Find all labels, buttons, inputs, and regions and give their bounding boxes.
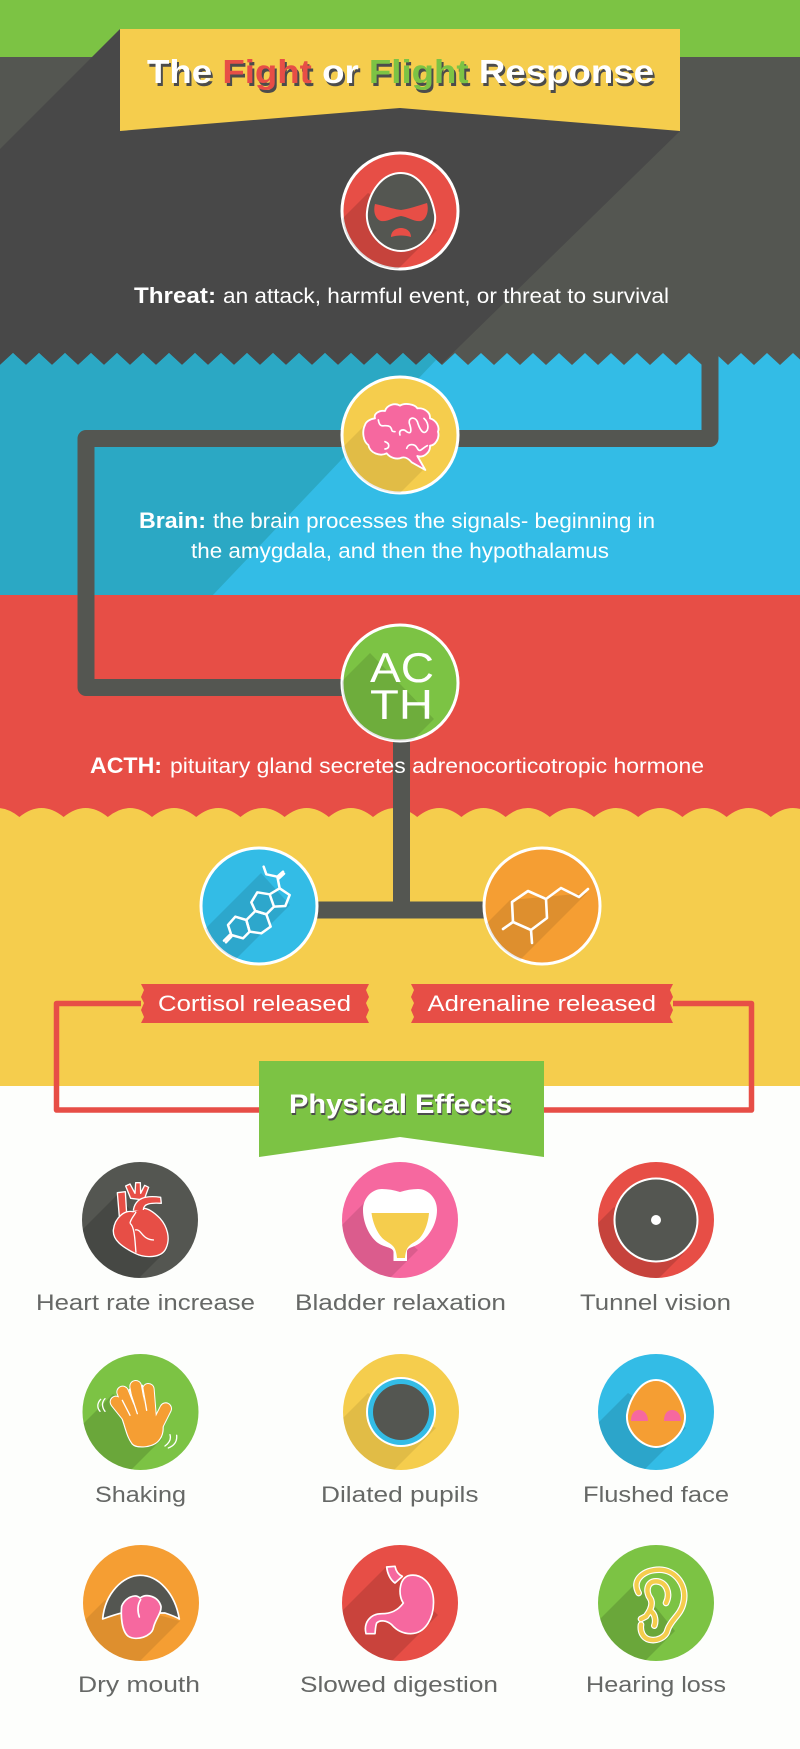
tag: adrenaline released (411, 984, 673, 1023)
icon: brain (340, 376, 460, 494)
physical effects banner (259, 1061, 544, 1157)
heading: physical effects: Physical Effects (289, 1089, 512, 1119)
tag: adrenaline released: Adrenaline released (428, 991, 656, 1016)
text: ACTH description: pituitary gland secretes adrenocorticotropic hormone (170, 754, 704, 778)
icon: heart (82, 1162, 198, 1278)
icon: cortisol molecule (200, 846, 318, 966)
text: brain description (139, 508, 655, 563)
icon: adrenaline molecule (482, 846, 602, 966)
icon: stomach (342, 1545, 458, 1661)
icon: threat face (340, 152, 460, 270)
icon: ACTH (340, 624, 460, 742)
tag: cortisol released (141, 984, 369, 1023)
icon: dry mouth (83, 1545, 199, 1661)
label: heart rate: Heart rate increase (36, 1290, 255, 1315)
label: dry mouth: Dry mouth (78, 1672, 200, 1697)
icon: ACTH: TH (370, 681, 433, 728)
label: bladder: Bladder relaxation (295, 1290, 506, 1315)
red connector: hormones to physical effects (56, 1004, 752, 1110)
icon: ear (598, 1545, 714, 1661)
title: The Fight or Flight Response (147, 53, 654, 90)
icon: dilated pupil (343, 1354, 459, 1470)
title banner (120, 29, 680, 131)
panel: ACTH red background (0, 595, 800, 820)
tag: cortisol released: Cortisol released (158, 991, 351, 1016)
icon: ACTH: AC (370, 644, 434, 691)
text: ACTH description: ACTH: (90, 753, 162, 778)
icon: bladder (342, 1162, 458, 1278)
icon: flushed face (598, 1354, 714, 1470)
text: brain description: the brain processes the signals- beginning in (213, 509, 655, 533)
text: brain description: the amygdala, and then the hypothalamus (191, 539, 609, 563)
connector: ACTH to hormones (316, 730, 485, 910)
panel: brain blue background (0, 353, 800, 595)
icon: tunnel vision (598, 1162, 714, 1278)
icon: shaking hand (82, 1354, 198, 1470)
connector: threat to brain to ACTH (86, 350, 710, 688)
label: hearing loss: Hearing loss (586, 1672, 726, 1697)
panel: threat dark background (0, 57, 800, 367)
label: dilated pupils: Dilated pupils (321, 1482, 478, 1507)
long shadow of title banner (0, 29, 680, 385)
text: brain description: Brain: (139, 508, 206, 533)
label: tunnel vision: Tunnel vision (580, 1290, 731, 1315)
top green band (0, 0, 800, 58)
long shadow on blue panel (0, 340, 455, 596)
label: flushed face: Flushed face (583, 1482, 729, 1507)
label: shaking: Shaking (95, 1482, 186, 1507)
label: slowed digestion: Slowed digestion (300, 1672, 498, 1697)
panel: hormones yellow background (0, 808, 800, 1086)
text: threat description: an attack, harmful event, or threat to survival (223, 284, 669, 308)
text: threat description: Threat: (134, 283, 216, 308)
